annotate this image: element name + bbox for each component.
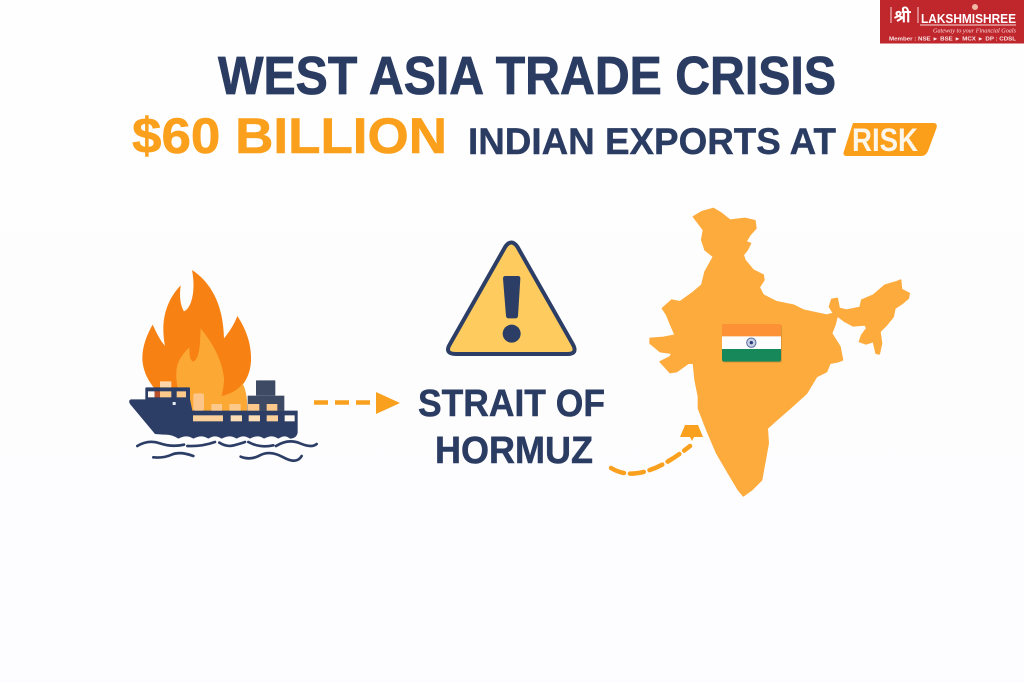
- label: Strait of Hormuz: [418, 383, 605, 472]
- arrow: ship to strait: [314, 392, 400, 414]
- map: India: [650, 208, 909, 496]
- icon: burning cargo ship: [129, 270, 317, 461]
- icon: Indian flag: [722, 324, 782, 363]
- subtitle: $60 billion: $60 BILLION: [132, 108, 447, 164]
- subtitle: Indian exports at: INDIAN EXPORTS AT: [468, 121, 836, 162]
- flames: [142, 270, 251, 412]
- logo: Lakshmishree: Member : NSE ► BSE ► MCX ► DP : CDSL: [889, 36, 1017, 42]
- bridge: [145, 381, 190, 401]
- ship hull: [129, 399, 298, 439]
- logo: Lakshmishree: [880, 0, 1024, 44]
- label: Strait of Hormuz: STRAIT OF: [418, 383, 605, 425]
- icon: warning triangle: [448, 242, 575, 354]
- logo: Lakshmishree: LAKSHMISHREE: [921, 12, 1016, 26]
- logo: Lakshmishree: Gateway to your Financial Goals: [933, 28, 1017, 34]
- logo: Lakshmishree: श्री: [893, 6, 911, 26]
- title: WEST ASIA TRADE CRISIS: [218, 46, 836, 106]
- containers: [173, 380, 295, 421]
- label: Strait of Hormuz: HORMUZ: [435, 430, 593, 472]
- badge: risk: RISK: [852, 122, 918, 158]
- arrow: strait to India: [611, 425, 703, 474]
- waves: [137, 441, 317, 461]
